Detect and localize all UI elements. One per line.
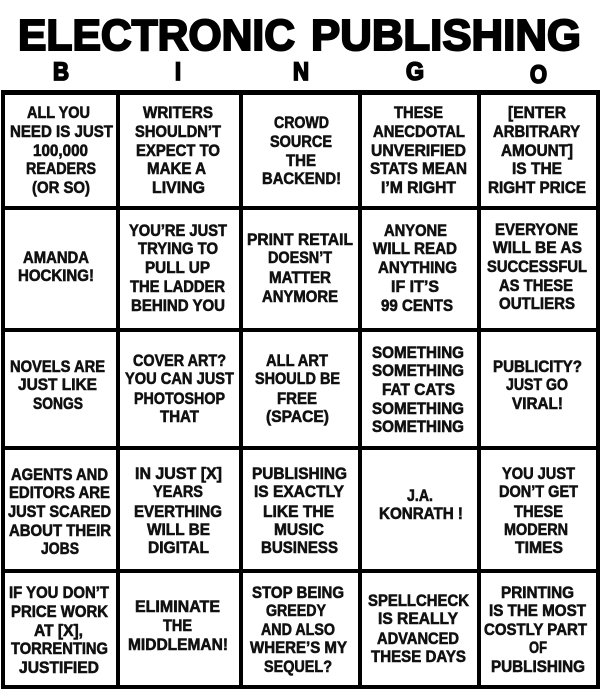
cell: printing cost: COSTLY PART xyxy=(484,621,587,639)
cell: publicity viral: VIRAL! xyxy=(512,395,563,413)
cell: fat cats: SOMETHING xyxy=(372,400,464,418)
cell: everything digital: DIGITAL xyxy=(148,539,209,557)
cell: where's my sequel xyxy=(243,573,358,685)
cell: torrenting justified: AT [X], xyxy=(34,622,83,640)
cell: fat cats: FAT CATS xyxy=(382,381,455,399)
bingo column letters xyxy=(53,58,547,89)
cell: writers shouldn't expect: EXPECT TO xyxy=(136,142,220,160)
cell: outliers: WILL BE AS xyxy=(493,239,582,257)
cell: music business: IS EXACTLY xyxy=(254,483,344,501)
cell: amanda hocking xyxy=(5,210,116,328)
cell: publicity viral: PUBLICITY? xyxy=(493,358,582,376)
cell: music business: MUSIC xyxy=(274,521,324,539)
cell: print retail xyxy=(243,210,358,328)
cell: arbitrary amount: RIGHT PRICE xyxy=(488,179,586,197)
cell: crowd source: THE xyxy=(286,152,316,170)
cell: torrenting justified xyxy=(5,573,116,685)
cell: torrenting justified: JUSTIFIED xyxy=(19,659,99,677)
cell: music business xyxy=(243,450,358,569)
cell: spellcheck: ADVANCED xyxy=(377,630,459,648)
cell: 99 cents: ANYTHING xyxy=(378,259,457,277)
cell: pull up the ladder: YOU’RE JUST xyxy=(129,222,227,240)
cell: where's my sequel: STOP BEING xyxy=(252,584,344,602)
cell: writers shouldn't expect: WRITERS xyxy=(143,104,213,122)
cell: cover art: COVER ART? xyxy=(133,352,226,370)
cell: agents and editors: AGENTS AND xyxy=(11,466,108,484)
cell: printing cost xyxy=(481,573,596,685)
cell: print retail: ANYMORE xyxy=(262,288,338,306)
bingo column letters: B xyxy=(53,58,69,86)
cell: pull up the ladder: PULL UP xyxy=(145,259,210,277)
cell: where's my sequel: SEQUEL? xyxy=(264,658,332,676)
cell: print retail: DOESN’T xyxy=(268,249,332,267)
cell: print retail: PRINT RETAIL xyxy=(247,231,353,249)
cell: everything digital xyxy=(120,450,239,569)
cell: torrenting justified: IF YOU DON’T xyxy=(9,584,109,602)
cell: where's my sequel: GREEDY xyxy=(266,602,326,620)
cell: modern times: YOU JUST xyxy=(502,465,575,483)
cell: 99 cents xyxy=(362,210,477,328)
cell: outliers xyxy=(481,210,596,328)
cell: music business: LIKE THE xyxy=(263,503,334,521)
cell: eliminate the middleman: MIDDLEMAN! xyxy=(128,636,228,654)
cell: anecdotal stats xyxy=(362,95,477,206)
cell: publicity viral: JUST GO xyxy=(506,376,568,394)
cell: outliers: EVERYONE xyxy=(495,221,578,239)
cell: spellcheck xyxy=(362,573,477,685)
cell: anecdotal stats: I’M RIGHT xyxy=(381,179,456,197)
cell: anecdotal stats: STATS MEAN xyxy=(370,160,467,178)
cell: outliers: AS THESE xyxy=(499,277,573,295)
cell: all art free: SHOULD BE xyxy=(255,370,340,388)
cell: novels like songs: JUST LIKE xyxy=(18,376,97,394)
cell: pull up the ladder: TRYING TO xyxy=(138,240,218,258)
cell: fat cats xyxy=(362,332,477,446)
cell: 99 cents: WILL READ xyxy=(373,240,457,258)
cell: 99 cents: IF IT’S xyxy=(391,278,439,296)
cell: j.a. konrath: J.A. xyxy=(407,487,433,505)
cell: writers shouldn't expect: SHOULDN’T xyxy=(135,123,221,141)
cell: fat cats: SOMETHING xyxy=(372,362,464,380)
cell: crowd source: SOURCE xyxy=(270,133,332,151)
cell: modern times xyxy=(481,450,596,569)
cell: eliminate the middleman xyxy=(120,573,239,685)
cell: writers shouldn't expect: LIVING xyxy=(152,179,205,197)
cell: anecdotal stats: THESE xyxy=(394,104,443,122)
title: PUBLISHING xyxy=(311,11,581,60)
cell: torrenting justified: TORRENTING xyxy=(11,640,108,658)
cell: eliminate the middleman: ELIMINATE xyxy=(135,598,220,616)
cell: all you need: READERS xyxy=(26,160,96,178)
cell: printing cost: IS THE MOST xyxy=(489,602,586,620)
bingo column letters: G xyxy=(406,58,424,86)
cell: everything digital: EVERTHING xyxy=(134,503,222,521)
cell: modern times: TIMES xyxy=(515,539,563,557)
cell: all you need xyxy=(5,95,116,206)
cell: outliers: SUCCESSFUL xyxy=(487,258,587,276)
title: ELECTRONIC xyxy=(18,11,295,60)
cell: spellcheck: SPELLCHECK xyxy=(368,592,469,610)
cell: crowd source: CROWD xyxy=(274,114,329,132)
cell: all you need: NEED IS JUST xyxy=(10,123,113,141)
cell: amanda hocking: AMANDA xyxy=(23,249,89,267)
cell: novels like songs: SONGS xyxy=(33,395,83,413)
cell: amanda hocking: HOCKING! xyxy=(18,267,94,285)
cell: fat cats: SOMETHING xyxy=(372,418,464,436)
cell: music business: PUBLISHING xyxy=(252,465,347,483)
cell: printing cost: PUBLISHING xyxy=(491,658,585,676)
cell: pull up the ladder: THE LADDER xyxy=(130,278,225,296)
cell: all you need: 100,000 xyxy=(33,142,88,160)
cell: pull up the ladder xyxy=(120,210,239,328)
bingo column letters: N xyxy=(293,58,309,86)
cell: all you need: (OR SO) xyxy=(32,179,90,197)
cell: print retail: MATTER xyxy=(269,269,331,287)
cell: modern times: MODERN xyxy=(504,521,568,539)
cell: j.a. konrath xyxy=(362,450,477,569)
cell: anecdotal stats: ANECDOTAL xyxy=(373,123,465,141)
cell: novels like songs: NOVELS ARE xyxy=(10,358,105,376)
cell: all you need: ALL YOU xyxy=(27,104,90,122)
cell: printing cost: PRINTING xyxy=(501,584,574,602)
cell: cover art xyxy=(120,332,239,446)
cell: writers shouldn't expect: MAKE A xyxy=(147,160,206,178)
cell: crowd source xyxy=(243,95,358,206)
cell: modern times: THESE xyxy=(514,503,563,521)
cell: pull up the ladder: BEHIND YOU xyxy=(131,297,225,315)
cell: agents and editors: JUST SCARED xyxy=(8,503,111,521)
cell: agents and editors: EDITORS ARE xyxy=(9,484,110,502)
cell: cover art: THAT xyxy=(160,408,199,426)
cell: eliminate the middleman: THE xyxy=(163,617,192,635)
cell: where's my sequel: AND ALSO xyxy=(261,621,335,639)
cell: everything digital: IN JUST [X] xyxy=(135,465,222,483)
cell: cover art: YOU CAN JUST xyxy=(125,370,234,388)
cell: agents and editors: JOBS xyxy=(41,540,79,558)
cell: arbitrary amount: [ENTER xyxy=(508,104,566,122)
cell: printing cost: OF xyxy=(529,639,547,657)
cell: spellcheck: IS REALLY xyxy=(378,610,458,628)
cell: 99 cents: 99 CENTS xyxy=(381,297,453,315)
cell: everything digital: YEARS xyxy=(153,483,203,501)
cell: all art free: FREE xyxy=(277,390,317,408)
cell: cover art: PHOTOSHOP xyxy=(134,390,225,408)
cell: novels like songs xyxy=(5,332,116,446)
cell: all art free: ALL ART xyxy=(266,352,328,370)
cell: torrenting justified: PRICE WORK xyxy=(11,603,108,621)
cell: arbitrary amount: ARBITRARY xyxy=(493,123,580,141)
cell: arbitrary amount: AMOUNT] xyxy=(501,142,573,160)
cell: agents and editors: ABOUT THEIR xyxy=(9,522,111,540)
cell: crowd source: BACKEND! xyxy=(262,170,341,188)
cell: all art free: (SPACE) xyxy=(266,408,329,426)
cell: anecdotal stats: UNVERIFIED xyxy=(371,142,466,160)
cell: fat cats: SOMETHING xyxy=(372,344,464,362)
cell: j.a. konrath: KONRATH ! xyxy=(379,505,463,523)
cell: music business: BUSINESS xyxy=(261,539,338,557)
cell: where's my sequel: WHERE’S MY xyxy=(250,639,347,657)
cell: arbitrary amount xyxy=(481,95,596,206)
bingo column letters: O xyxy=(530,61,547,89)
cell: 99 cents: ANYONE xyxy=(384,222,447,240)
cell: publicity viral xyxy=(481,332,596,446)
cell: outliers: OUTLIERS xyxy=(499,295,575,313)
cell: all art free xyxy=(243,332,358,446)
cell: everything digital: WILL BE xyxy=(147,521,210,539)
cell: arbitrary amount: IS THE xyxy=(512,160,562,178)
bingo column letters: I xyxy=(175,58,181,86)
cell: modern times: DON’T GET xyxy=(499,483,578,501)
cell: agents and editors xyxy=(5,450,116,569)
cell: writers shouldn't expect xyxy=(120,95,239,206)
cell: spellcheck: THESE DAYS xyxy=(371,648,466,666)
title xyxy=(18,11,581,60)
